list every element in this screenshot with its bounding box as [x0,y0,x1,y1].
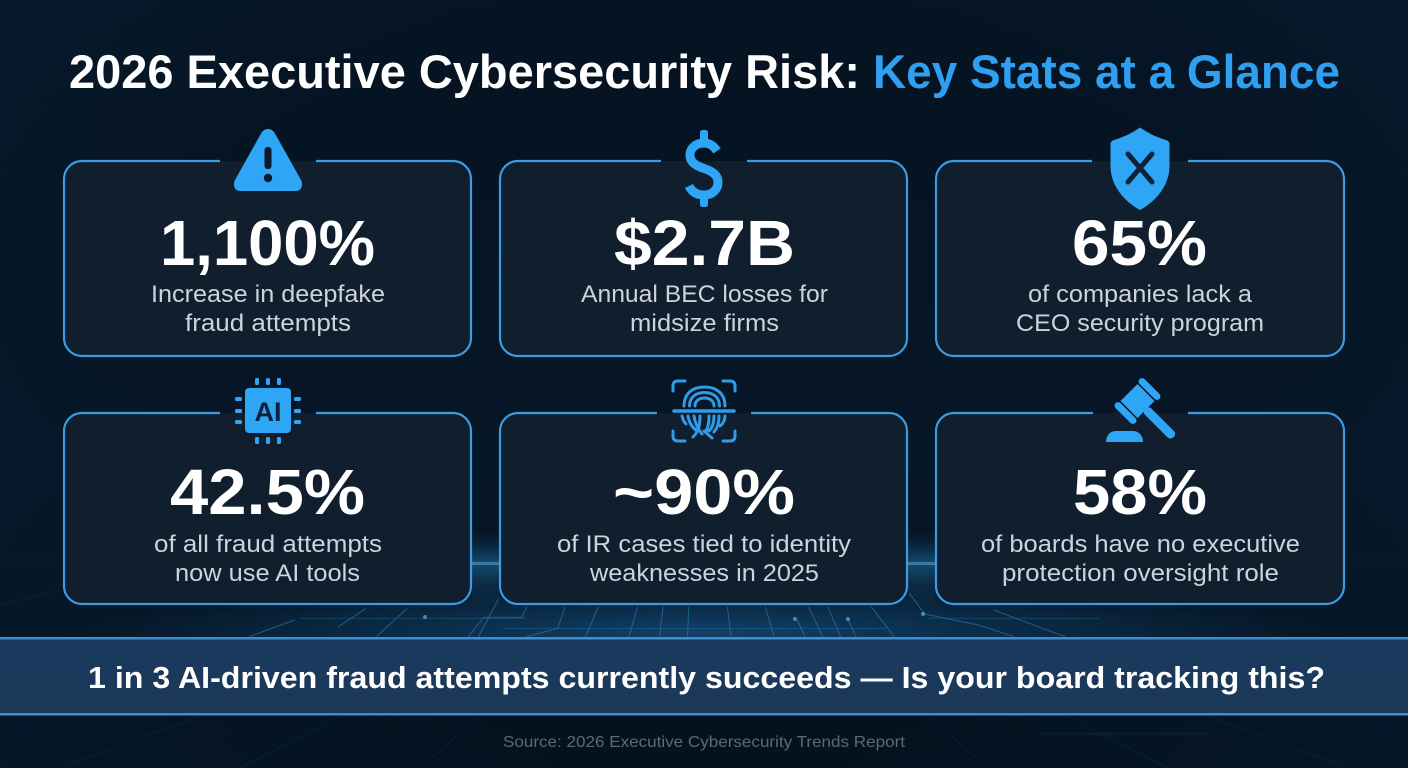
panel: AI fraud attempts [64,378,471,604]
description: of companies lack a [1028,281,1253,308]
description: Annual BEC losses for [581,281,828,308]
description: of all fraud attempts [154,531,382,558]
description: CEO security program [1016,310,1264,337]
description: Increase in deepfake [151,281,385,308]
card border [500,161,907,356]
description: now use AI tools [175,560,360,587]
description: protection oversight role [1002,560,1279,587]
title: Key Stats at a Glance [873,45,1340,98]
icon: warning triangle [234,129,302,191]
description: weaknesses in 2025 [589,560,819,587]
icon: AI chip: AI [254,397,282,427]
card border [936,161,1344,356]
description: fraud attempts [185,310,351,337]
card border [64,413,471,604]
panel: CEO security program [936,128,1344,356]
callout banner: 1 in 3 AI-driven fraud attempts currently succeeds — Is your board tracking this? [88,660,1325,695]
stat: 1,100%: 1,100% [160,207,375,279]
card border [936,413,1344,604]
stat: $2.7B: $2.7B [614,207,795,279]
icon: fingerprint scan [673,381,735,441]
card border [64,161,471,356]
callout banner [0,637,1408,716]
stat: 65%: 65% [1072,207,1207,279]
description: of IR cases tied to identity [557,531,851,558]
icon: AI chip [235,378,301,444]
title: 2026 Executive Cybersecurity Risk: [69,45,860,98]
icon: gavel [1106,377,1188,452]
card border [500,413,907,604]
icon: shield with x [1110,128,1170,210]
description: of boards have no executive [981,531,1300,558]
panel: deepfake fraud [64,129,471,356]
icon: dollar sign [689,130,718,207]
source note: Source: 2026 Executive Cybersecurity Trends Report [503,734,906,751]
stat: ~90%: ~90% [613,456,795,528]
panel: BEC losses [500,130,907,356]
stat: 58%: 58% [1073,456,1207,528]
panel: board oversight [936,377,1344,604]
stat: 42.5%: 42.5% [170,456,365,528]
description: midsize firms [630,310,779,337]
panel: identity weaknesses [500,381,907,604]
